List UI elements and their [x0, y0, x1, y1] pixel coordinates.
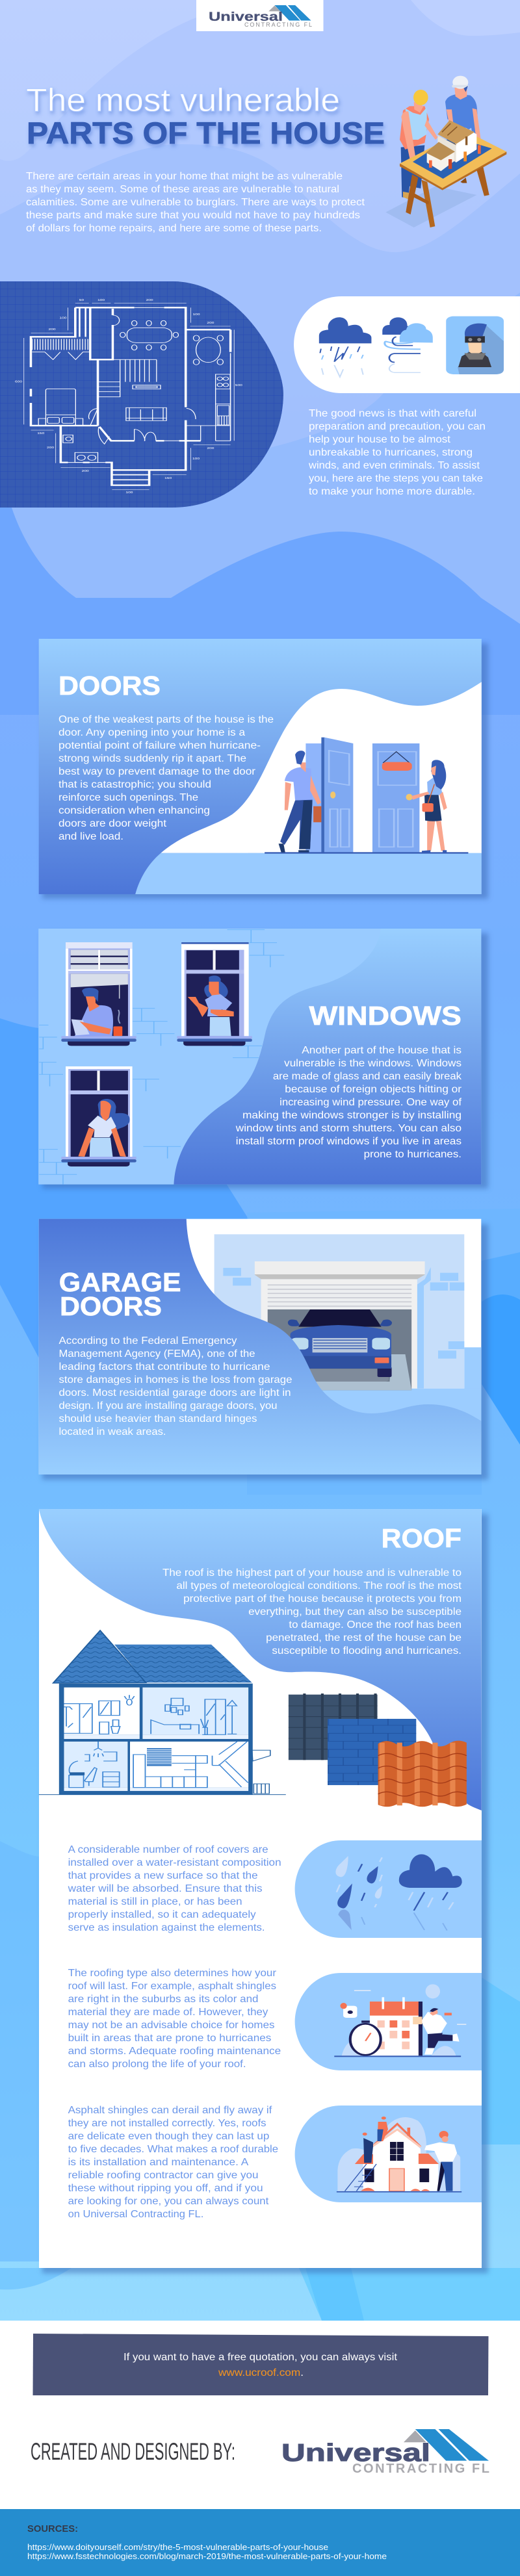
garage text: should use heavier than standard hinges [58, 1413, 257, 1424]
roof text: susceptible to flooding and hurricanes. [272, 1645, 462, 1656]
logo footer [281, 2429, 489, 2476]
floor plan: 200 [47, 446, 54, 450]
icon: blue roof tiles [328, 1719, 416, 1785]
good news text: The good news is that with careful [309, 408, 476, 419]
good news text: help your house to be almost [309, 434, 451, 445]
doors text: and live load. [58, 831, 124, 842]
text: asphalt shingles: are delicate even though they can last up [68, 2131, 269, 2142]
windows text: increasing wind pressure. One way of [280, 1097, 462, 1108]
heading: garage doors: DOORS [60, 1291, 162, 1321]
logo wordmark: Universal [209, 10, 283, 24]
garage text: store damages in homes is the loss from garage [58, 1374, 292, 1385]
doors text: best way to prevent damage to the door [58, 766, 256, 777]
icon: doors [306, 738, 419, 853]
logo footer: CONTRACTING FL [352, 2462, 489, 2476]
text: asphalt shingles: are looking for one, you can always count [68, 2196, 269, 2207]
floor plan: 100 [193, 313, 200, 316]
source links [27, 2542, 387, 2561]
text: roofing type: material they are made of. However, they [68, 2007, 268, 2018]
panel: rain icon [295, 1840, 482, 1938]
garage text: design. If you are installing garage doors, you [58, 1400, 277, 1411]
worker right [445, 76, 481, 143]
icon: rain cloud [319, 317, 371, 377]
floor plan [15, 299, 242, 495]
text: roofing type: roof will last. For example, asphalt shingles [68, 1981, 276, 1992]
text: roof covers: water will be absorbed. Ensure that this [68, 1883, 263, 1894]
window: man with mug [61, 942, 136, 1046]
icon: house cross-section [39, 1630, 286, 1795]
windows text: making the windows stronger is by installing [242, 1110, 462, 1121]
good news text: preparation and precaution, you can [309, 421, 486, 432]
doors text: that is catastrophic; you should [58, 779, 211, 790]
heading: roof: ROOF [382, 1523, 462, 1553]
panel: sources [0, 2509, 520, 2576]
icon: wind cloud [382, 317, 433, 372]
window: woman leaning [61, 1066, 136, 1166]
doors text: door. Any opening into your home is a [58, 727, 245, 738]
panel: blueprint [0, 281, 286, 508]
icon: man with bag [279, 751, 321, 853]
panel: roof [39, 1509, 488, 2273]
callout text: If you want to have a free quotation, you can always visit [124, 2352, 398, 2363]
text: roofing type: can also prolong the life of your roof. [68, 2059, 246, 2070]
text: roofing type: and storms. Adequate roofing maintenance [68, 2046, 281, 2057]
floor plan: 150 [164, 477, 172, 480]
intro text: There are certain areas in your home that might be as vulnerable [26, 171, 343, 182]
text: asphalt shingles: they are not installed correctly. Yes, roofs [68, 2118, 266, 2129]
created by: CREATED AND DESIGNED BY: [31, 2438, 235, 2465]
text: roofing type: built in areas that are prone to hurricanes [68, 2033, 271, 2044]
panel: footer white [0, 2321, 520, 2509]
callout link: www.ucroof.com . [218, 2367, 304, 2378]
floor plan: 100 [192, 457, 200, 461]
roof text: all types of meteorological conditions. The roof is the most [176, 1580, 462, 1591]
text: roof covers: that provides a new surface so that the [68, 1870, 258, 1881]
logo footer: Universal [281, 2440, 430, 2467]
walls [31, 307, 231, 485]
table [400, 132, 506, 227]
panel: house builders icon [295, 2106, 482, 2202]
roof text [162, 1567, 462, 1656]
intro text [26, 171, 365, 234]
windows text: are made of glass and can easily break [273, 1071, 462, 1082]
roof text: penetrated, the rest of the house can be [266, 1632, 462, 1643]
title: The most vulnerable [26, 82, 340, 118]
title: PARTS OF THE HOUSE [27, 116, 385, 150]
text: roof covers: A considerable number of roof covers are [68, 1844, 268, 1855]
garage text: doors. Most residential garage doors are light in [58, 1387, 291, 1398]
text: roof covers [68, 1844, 281, 1933]
logo subtitle: CONTRACTING FL [244, 21, 312, 28]
text: roof covers: serve as insulation against the elements. [68, 1922, 265, 1933]
roof text: everything, but they can also be susceptible [248, 1606, 462, 1617]
icon: burglar [446, 316, 504, 374]
floor plan: 50 [79, 299, 84, 302]
icon: slate roof tiles [289, 1694, 378, 1760]
doors text: reinforce such openings. The [58, 792, 198, 803]
text: roofing type: may not be an advisable choice for homes [68, 2020, 274, 2031]
icon: woman with bag [411, 760, 447, 853]
text: roofing type: are right in the suburbs as its color and [68, 1994, 258, 2005]
floor plan: 150 [37, 432, 44, 435]
windows text [235, 1045, 462, 1160]
text: asphalt shingles: these without ripping you off, and if you [68, 2183, 263, 2194]
panel: garage doors [39, 1219, 488, 1480]
floor plan: 100 [59, 317, 66, 320]
doors text: One of the weakest parts of the house is the [58, 714, 274, 725]
text: roof covers: installed over a water-resistant composition [68, 1857, 281, 1868]
doors text: strong winds suddenly rip it apart. The [58, 753, 246, 764]
windows text: Another part of the house that is [302, 1045, 462, 1056]
text: asphalt shingles: Asphalt shingles can derail and fly away if [68, 2105, 272, 2116]
heading: garage doors [59, 1267, 181, 1321]
heading: doors: DOORS [58, 671, 161, 701]
icon: garage with car [255, 1261, 431, 1390]
sources heading: SOURCES: [27, 2523, 78, 2534]
text: asphalt shingles: reliable roofing contractor can give you [68, 2170, 258, 2181]
floor plan: 600 [15, 381, 22, 383]
icon: workers with house model [385, 76, 506, 227]
text: asphalt shingles: on Universal Contracting FL. [68, 2209, 203, 2220]
garage text: leading factors that contribute to hurricane [58, 1361, 270, 1372]
worker left [400, 90, 437, 200]
source links: https://www.fsstechnologies.com/blog/march-2019/the-most-vulnerable-parts-of-your-home [27, 2551, 387, 2561]
source links: https://www.doityourself.com/stry/the-5-most-vulnerable-parts-of-your-house [27, 2542, 328, 2552]
bricks [223, 1268, 464, 1359]
floor plan: 200 [207, 447, 214, 450]
floor plan: 500 [235, 384, 242, 387]
doors text: consideration when enhancing [58, 805, 210, 816]
title [26, 82, 385, 150]
good news text [308, 408, 486, 497]
garage text: Management Agency (FEMA), one of the [58, 1348, 255, 1359]
rooms furniture [64, 1695, 248, 1788]
floor plan: 200 [207, 322, 214, 325]
doors text: potential point of failure when hurricane- [58, 740, 261, 751]
good news text: you, here are the steps you can take [309, 473, 483, 484]
model house [426, 120, 481, 171]
builders [363, 2138, 373, 2163]
text: roofing type [68, 1968, 281, 2070]
dimension lines [24, 303, 234, 489]
logo roof mark [268, 5, 311, 21]
windows text: window tints and storm shutters. You can also [235, 1123, 462, 1134]
text: roof covers: properly installed, so it can adequately [68, 1909, 256, 1920]
garage text: According to the Federal Emergency [58, 1335, 237, 1346]
floor plan: 100 [98, 299, 105, 302]
good news text: unbreakable to hurricanes, strong [309, 447, 473, 458]
intro text: as they may seem. Some of these areas are vulnerable to natural [26, 184, 339, 195]
roof text: to damage. Once the roof has been [289, 1619, 462, 1630]
floor plan: 200 [82, 470, 89, 473]
floor plan: 100 [125, 491, 133, 495]
panel: windows [38, 929, 488, 1189]
good news text: to make your home more durable. [309, 486, 475, 497]
intro text: calamities. Some are vulnerable to burglars. There are ways to protect [26, 197, 365, 208]
roof text: The roof is the highest part of your house and is vulnerable to [162, 1567, 462, 1578]
window: woman [177, 942, 252, 1046]
doors text [58, 714, 274, 842]
doors text: doors are door weight [58, 818, 167, 829]
panel: weather and burglar icons [294, 296, 520, 393]
windows text: vulnerable is the windows. Windows [284, 1058, 462, 1069]
windows text: prone to hurricanes. [364, 1149, 462, 1160]
text: asphalt shingles: is its installation and maintenance. A [68, 2157, 249, 2168]
heading: windows: WINDOWS [309, 1001, 462, 1031]
panel: calendar icon [295, 1973, 482, 2070]
intro text: these parts and make sure that you would not have to pay hundreds [26, 210, 360, 221]
floor plan: 200 [146, 299, 153, 302]
heading: garage doors: GARAGE [59, 1267, 181, 1297]
windows text: because of foreign objects hitting or [285, 1084, 462, 1095]
garage text [58, 1335, 292, 1437]
text: roofing type: The roofing type also determines how your [68, 1968, 277, 1979]
logo box header [196, 0, 324, 31]
intro text: of dollars for home repairs, and here are some of these parts. [26, 223, 322, 234]
windows text: install storm proof windows if you live in areas [236, 1136, 462, 1147]
text: asphalt shingles: to five decades. What makes a roof durable [68, 2144, 278, 2155]
furniture [32, 315, 231, 463]
floor plan: 200 [49, 328, 56, 331]
text: asphalt shingles [68, 2105, 278, 2220]
garage text: located in weak areas. [58, 1426, 166, 1437]
roof text: protective part of the house because it protects you from [183, 1593, 462, 1604]
text: roof covers: material is still in place, or has been [68, 1896, 242, 1907]
panel: doors [39, 639, 488, 899]
panel: quotation callout [32, 2334, 489, 2395]
icon: orange roof tiles [378, 1741, 467, 1807]
good news text: winds, and even criminals. To assist [308, 460, 480, 471]
